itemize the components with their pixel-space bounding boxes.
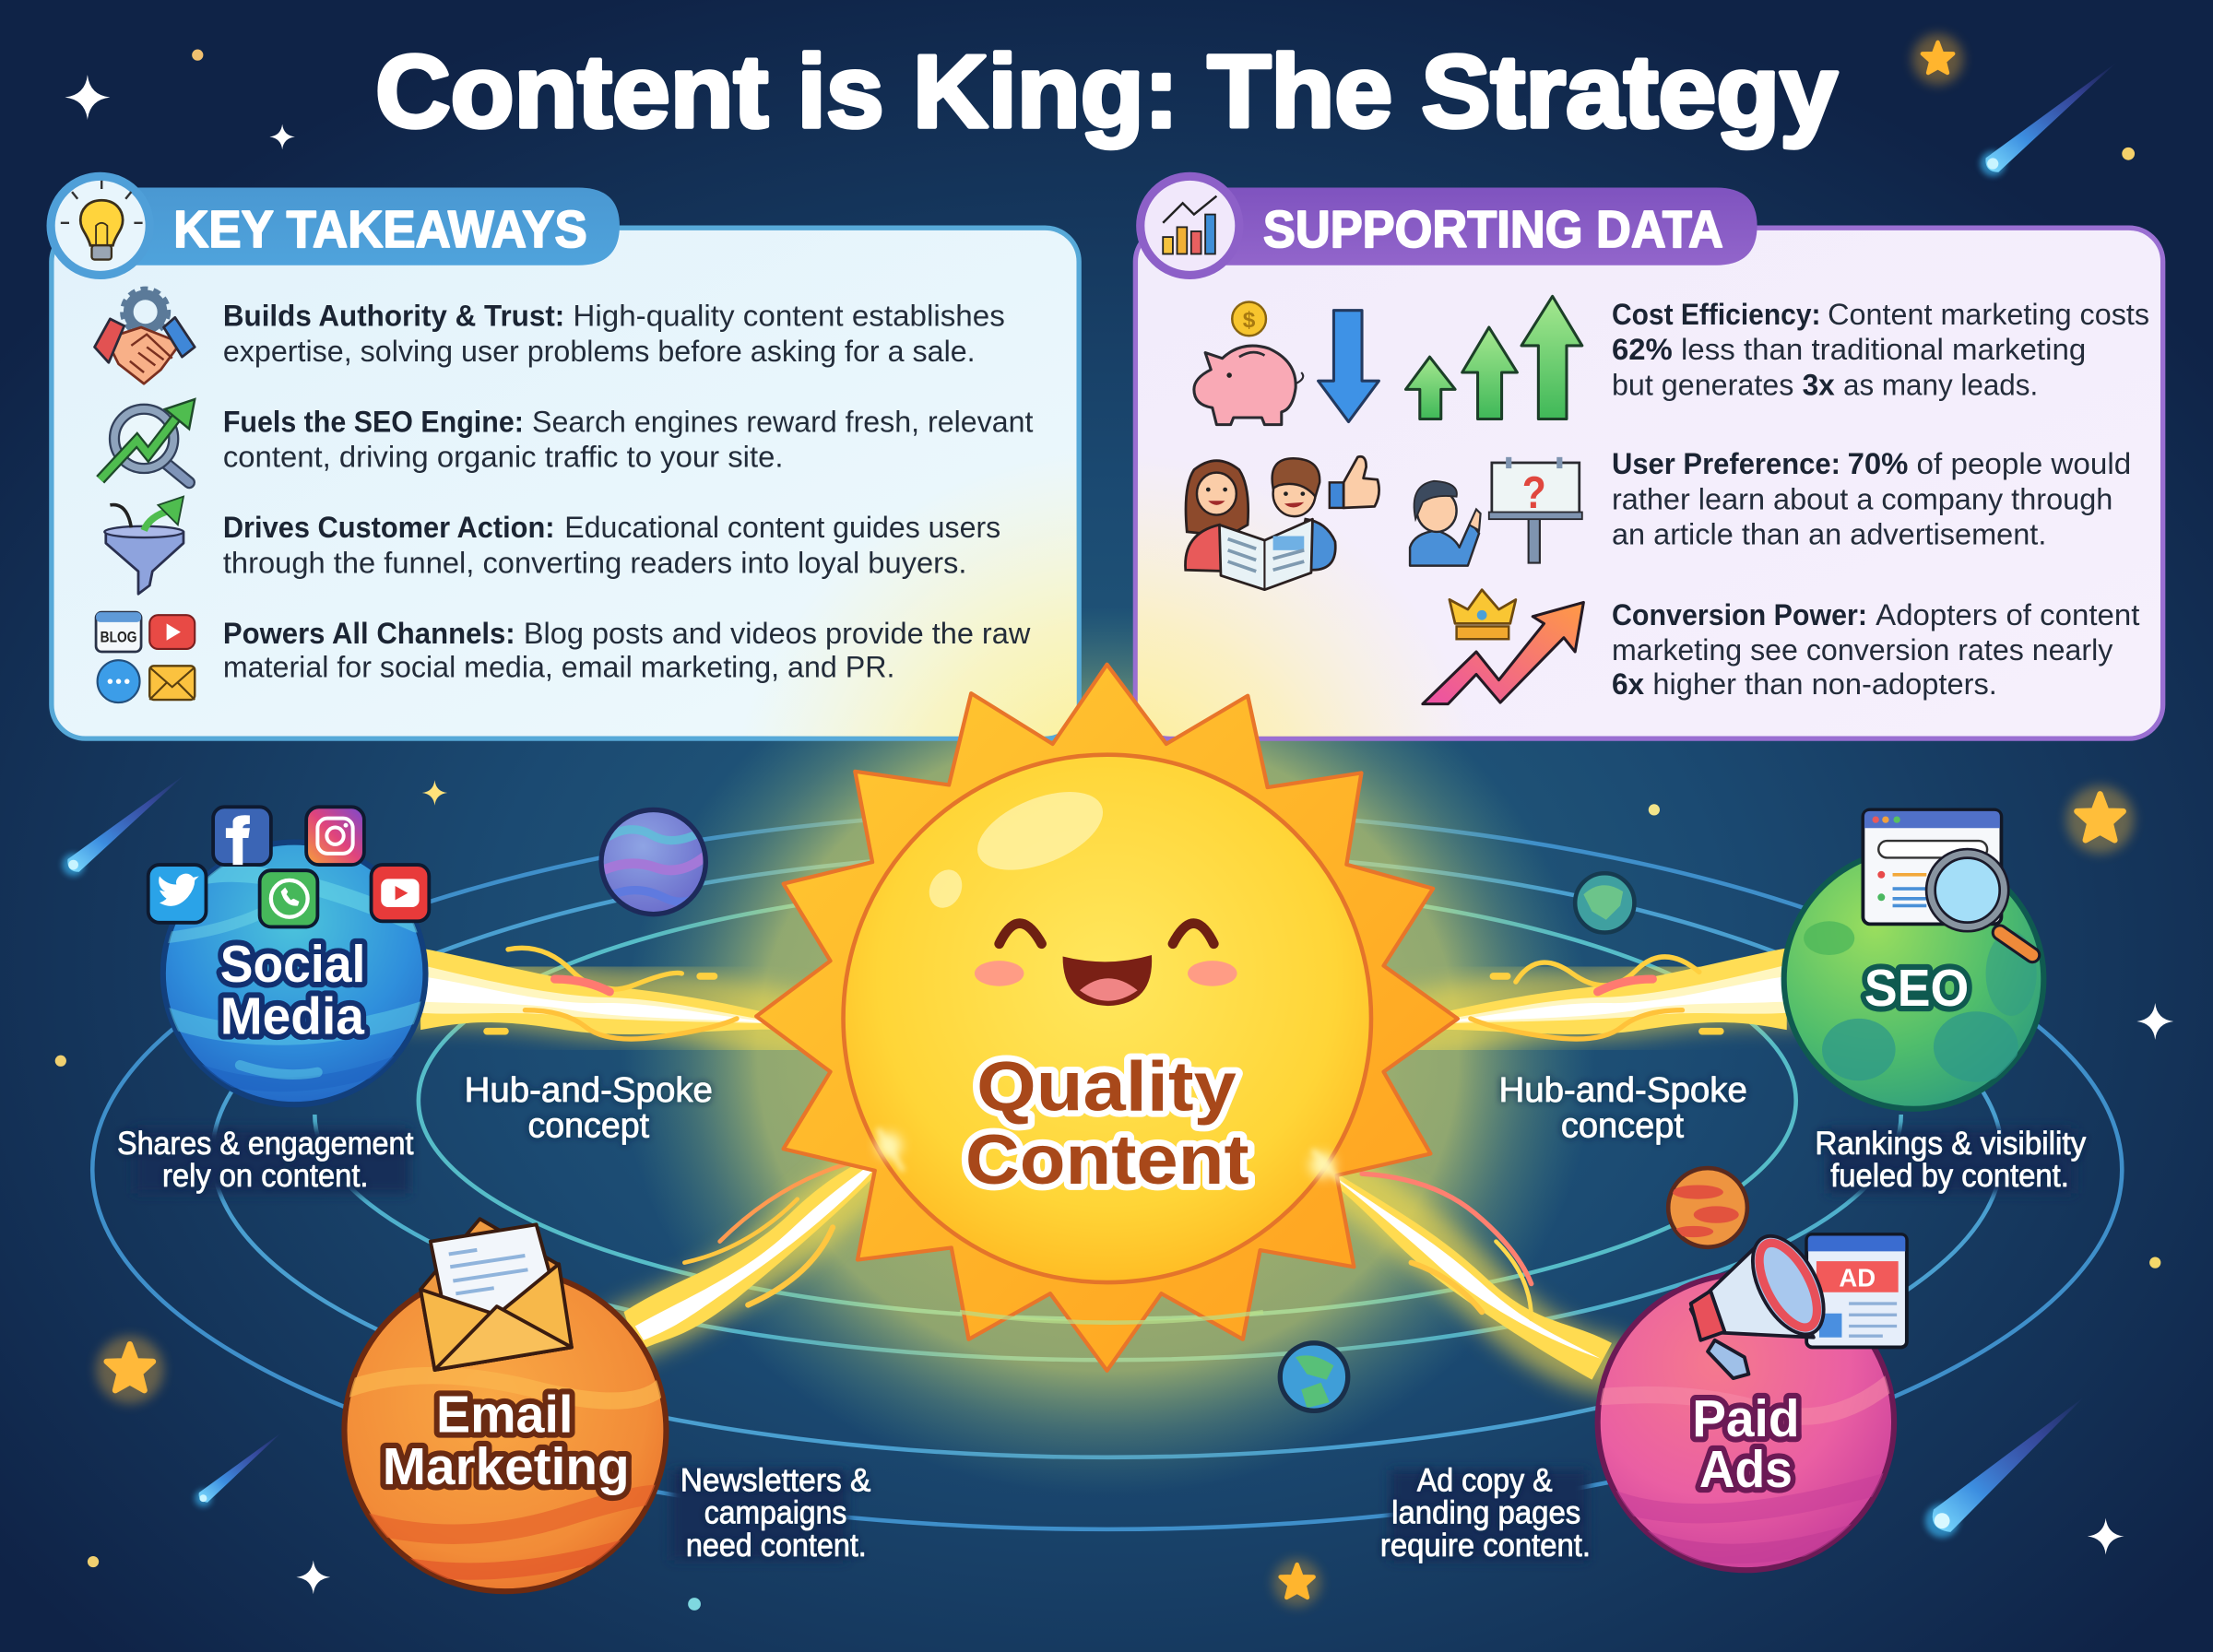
planet bands (1602, 1375, 1899, 1553)
caption: social media (117, 1126, 414, 1194)
icon: instagram (306, 807, 364, 865)
icon: content channels: BLOG (101, 628, 136, 645)
orbit rings (92, 809, 2122, 1529)
panel: key takeaways (51, 176, 1079, 738)
planet: social media (148, 807, 431, 1104)
icon: magnifier with growth arrow (101, 399, 195, 482)
icon: conversion funnel (104, 497, 183, 594)
icon: handshake and gear (95, 289, 195, 384)
beam sparks on sun edge (877, 1128, 1341, 1182)
icon: rising arrow (1423, 602, 1583, 704)
icon: ad window (1806, 1234, 1907, 1347)
caption: seo (1815, 1126, 2087, 1194)
icon: light bulb (61, 181, 143, 260)
planet: paid ads (1598, 1224, 1907, 1570)
small planet: earth (1280, 1343, 1348, 1410)
planet bands (346, 1375, 670, 1572)
panel header: key takeaways: KEY TAKEAWAYS (173, 200, 587, 258)
takeaway: powers all channels: Powers All Channels: (223, 617, 515, 650)
data: conversion power: 6x (1612, 667, 1644, 701)
takeaway: powers all channels: Blog posts and videos provide the raw (524, 617, 1031, 650)
icon: browser window (1863, 809, 2001, 924)
beam: sun to email marketing (624, 1136, 904, 1351)
icon: twitter (148, 865, 206, 923)
sun label (965, 1047, 1249, 1199)
icon: megaphone (1691, 1224, 1839, 1378)
data: cost efficiency: but generates (1612, 368, 1793, 401)
takeaway: fuels the seo engine: Fuels the SEO Engine: (223, 405, 524, 438)
icon: people reading a newspaper (1185, 456, 1379, 590)
caption: email marketing (680, 1463, 870, 1564)
data: conversion power: higher than non-adopters. (1652, 667, 1997, 701)
icon: person and question board (1410, 457, 1582, 566)
title: Content is King: The Strategy (375, 34, 1838, 149)
planet label: Marketing (383, 1437, 630, 1495)
icon: leads up arrows (1405, 296, 1582, 419)
takeaway: drives customer action (223, 511, 1000, 579)
planet bands (162, 874, 431, 1085)
sun: quality content (756, 665, 1458, 1371)
takeaway: fuels the seo engine (223, 405, 1033, 474)
takeaway: fuels the seo engine: Search engines reward fresh, relevant (532, 405, 1033, 438)
icon: person and question board: ? (1522, 468, 1546, 518)
panel header: supporting data: SUPPORTING DATA (1263, 200, 1723, 258)
data: cost efficiency: as many leads. (1843, 368, 2038, 401)
data: cost efficiency: 62% (1612, 333, 1673, 366)
takeaway: drives customer action: Drives Customer Action: (223, 511, 555, 544)
beam: sun to seo (1410, 948, 1790, 1039)
takeaway: powers all channels: material for social media, email marketing, and PR. (223, 651, 894, 684)
data: user preference: rather learn about a company through (1612, 482, 2112, 515)
caption: seo: Rankings & visibility (1815, 1126, 2087, 1162)
takeaway: powers all channels (223, 617, 1031, 684)
sun disc (844, 755, 1371, 1282)
takeaway: builds authority: High-quality content establishes (573, 300, 1005, 333)
data: user preference: User Preference: (1612, 447, 1840, 480)
caption: hub and spoke left: concept (527, 1105, 649, 1145)
caption: email marketing: Newsletters & (680, 1463, 870, 1499)
caption: email marketing: need content. (686, 1528, 867, 1564)
planet label (1692, 1389, 1800, 1498)
data: conversion power (1612, 598, 2139, 701)
panel: supporting data (1135, 176, 2163, 738)
planet label: SEO (1864, 959, 1969, 1017)
caption: email marketing: campaigns (704, 1495, 846, 1531)
takeaway: builds authority (223, 300, 1005, 368)
small planet: green (1575, 873, 1634, 933)
takeaway: fuels the seo engine: content, driving organic traffic to your site. (223, 441, 783, 474)
data: user preference (1612, 447, 2131, 551)
planet label (220, 935, 365, 1045)
data: user preference: of people would (1917, 447, 2131, 480)
icon: whatsapp (260, 870, 317, 926)
caption: social media: rely on content. (162, 1158, 368, 1194)
planet label: Paid (1692, 1389, 1800, 1447)
icon: piggy bank with coin (1194, 301, 1303, 425)
icon: facebook (213, 807, 271, 865)
data: cost efficiency: Cost Efficiency: (1612, 298, 1820, 331)
planet label: Media (220, 987, 364, 1045)
planet continents (1804, 921, 2037, 1082)
icon: envelope with letter (420, 1219, 572, 1370)
icon: content channels (96, 612, 195, 702)
sun face (975, 924, 1237, 1006)
takeaway: drives customer action: through the funnel, converting readers into loyal buyers. (223, 546, 966, 579)
caption: paid ads: require content. (1380, 1528, 1591, 1564)
beam: sun to paid ads (1316, 1160, 1612, 1380)
icon: youtube (372, 865, 429, 921)
panel header: supporting data (1141, 176, 1757, 275)
caption: hub and spoke right: concept (1561, 1105, 1684, 1145)
data: cost efficiency: 3x (1803, 368, 1835, 401)
takeaway: drives customer action: Educational content guides users (564, 511, 1000, 544)
icon: cost down arrow (1319, 311, 1379, 422)
icon: piggy bank with coin: $ (1243, 308, 1256, 333)
caption: paid ads (1380, 1463, 1591, 1564)
caption: hub and spoke right (1499, 1070, 1747, 1145)
panel header: key takeaways (51, 176, 620, 275)
icon: bar chart (1163, 196, 1216, 254)
caption: paid ads: Ad copy & (1417, 1463, 1553, 1499)
planet label: Social (220, 935, 365, 993)
planet: seo (1784, 809, 2043, 1109)
icon: magnifying glass (1931, 854, 2032, 955)
sun rays (756, 665, 1458, 1371)
small planet: orange (1668, 1168, 1747, 1247)
caption: hub and spoke right: Hub-and-Spoke (1499, 1070, 1747, 1110)
sun label: Quality (976, 1047, 1237, 1126)
caption: social media: Shares & engagement (117, 1126, 414, 1162)
data: cost efficiency (1612, 298, 2149, 401)
inner orbit over sun (960, 1312, 1263, 1323)
planet label (383, 1385, 630, 1495)
caption backdrops (134, 1128, 2075, 1561)
data: cost efficiency: less than traditional marketing (1681, 333, 2086, 366)
caption: seo: fueled by content. (1830, 1158, 2069, 1194)
data: cost efficiency: Content marketing costs (1828, 298, 2149, 331)
sun background glow (621, 607, 1595, 1495)
small planet: purple (600, 809, 713, 914)
caption: hub and spoke left (465, 1070, 713, 1145)
data: conversion power: marketing see conversion rates nearly (1612, 633, 2112, 667)
data: conversion power: Conversion Power: (1612, 598, 1867, 631)
caption: paid ads: landing pages (1391, 1495, 1580, 1531)
icon: ad window: AD (1839, 1264, 1876, 1292)
planet label: Email (436, 1385, 573, 1443)
takeaway: builds authority: Builds Authority & Trust: (223, 300, 564, 333)
energy beams (418, 948, 1790, 1380)
icon: crown (1450, 590, 1516, 639)
sun label: Content (965, 1121, 1249, 1199)
planet label: Ads (1699, 1440, 1793, 1498)
takeaway: builds authority: expertise, solving user problems before asking for a sale. (223, 335, 976, 368)
data: user preference: an article than an advertisement. (1612, 518, 2046, 551)
planet: email marketing (344, 1219, 670, 1591)
beam: sun to social media (418, 948, 798, 1039)
caption: hub and spoke left: Hub-and-Spoke (465, 1070, 713, 1110)
data: conversion power: Adopters of content (1876, 598, 2139, 631)
data: user preference: 70% (1848, 447, 1908, 480)
sun highlights (923, 776, 1114, 914)
